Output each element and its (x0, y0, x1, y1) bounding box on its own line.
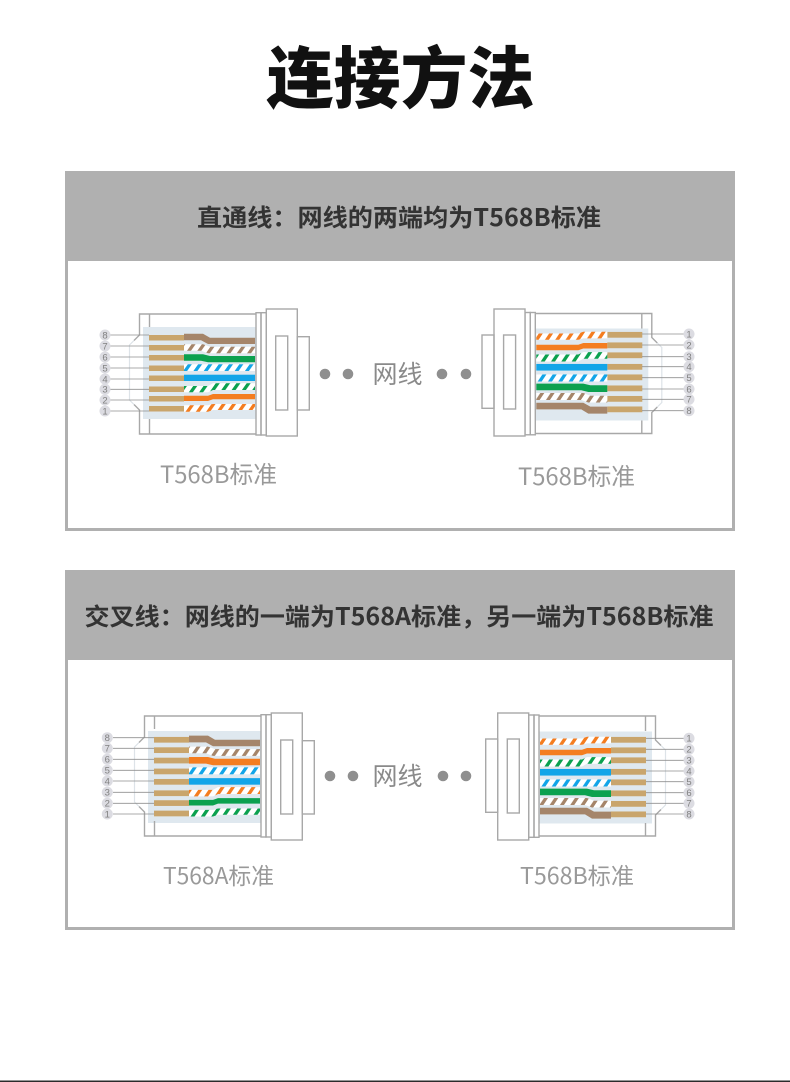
cable link: dots and label (325, 757, 471, 793)
connector: left T568A plug (102, 713, 314, 840)
connector: right T568B plug: 1 (686, 329, 692, 340)
connector: right T568B plug: 4 (686, 362, 692, 373)
connector: left T568B plug: 7 (102, 341, 108, 352)
connector: left T568A plug: 4 (105, 776, 110, 787)
connector: right T568B plug: 7 (686, 799, 692, 810)
panel frame (66, 572, 734, 928)
connector: left T568B plug: 3 (102, 385, 108, 396)
cable link: dots and label (320, 355, 471, 391)
connector: left T568A plug: 7 (105, 744, 110, 755)
connector: left T568B plug: 5 (102, 363, 108, 374)
connector: right T568B plug: 3 (686, 756, 692, 767)
heading: crossover: 交叉线：网线的一端为T568A标准，另一端为T568B标准 (84, 597, 714, 632)
label: left standard: T568A标准 (163, 857, 274, 891)
connector: left T568B plug: 6 (102, 352, 108, 363)
panel: straight-through cable (65, 171, 735, 530)
connector: left T568A plug: 6 (105, 755, 110, 766)
connector: left T568A plug: 3 (105, 788, 110, 799)
connector: left T568B plug: 1 (102, 406, 108, 417)
connector: left T568B plug: 2 (102, 395, 108, 406)
connector: right T568B plug: 2 (686, 745, 692, 756)
panel: crossover cable (65, 570, 735, 928)
connector: right T568B plug: 3 (686, 352, 692, 363)
cable link: dots and label: 网线 (372, 757, 423, 793)
title: 连接方法 (266, 26, 534, 122)
label: right standard: T568B标准 (518, 457, 635, 492)
connector: right T568B plug (486, 713, 694, 840)
connector: left T568B plug (100, 309, 309, 436)
connector: right T568B plug: 8 (686, 406, 692, 417)
connector: left T568B plug: 4 (102, 374, 108, 385)
connector: right T568B plug (482, 309, 694, 436)
connector: left T568B plug: 8 (102, 330, 108, 341)
connector: left T568A plug: 8 (105, 733, 110, 744)
connector: right T568B plug: 1 (686, 734, 692, 745)
connector: left T568A plug: 5 (105, 766, 110, 777)
label: right standard: T568B标准 (520, 857, 634, 891)
connector: right T568B plug: 7 (686, 395, 692, 406)
panel frame (66, 172, 734, 530)
connector: right T568B plug: 5 (686, 373, 692, 384)
connector: right T568B plug: 6 (686, 384, 692, 395)
connector: left T568A plug: 1 (105, 809, 110, 820)
panel header band (65, 171, 735, 261)
label: left standard: T568B标准 (160, 455, 277, 490)
cable link: dots and label: 网线 (372, 355, 423, 391)
connector: right T568B plug: 5 (686, 777, 692, 788)
connector: right T568B plug: 4 (686, 766, 692, 777)
connector: right T568B plug: 2 (686, 340, 692, 351)
panel header band (65, 570, 735, 660)
bottom rule (0, 1080, 790, 1082)
heading: straight-through: 直通线：网线的两端均为T568B标准 (197, 198, 601, 233)
connector: right T568B plug: 8 (686, 809, 692, 820)
connector: right T568B plug: 6 (686, 788, 692, 799)
connector: left T568A plug: 2 (105, 799, 110, 810)
